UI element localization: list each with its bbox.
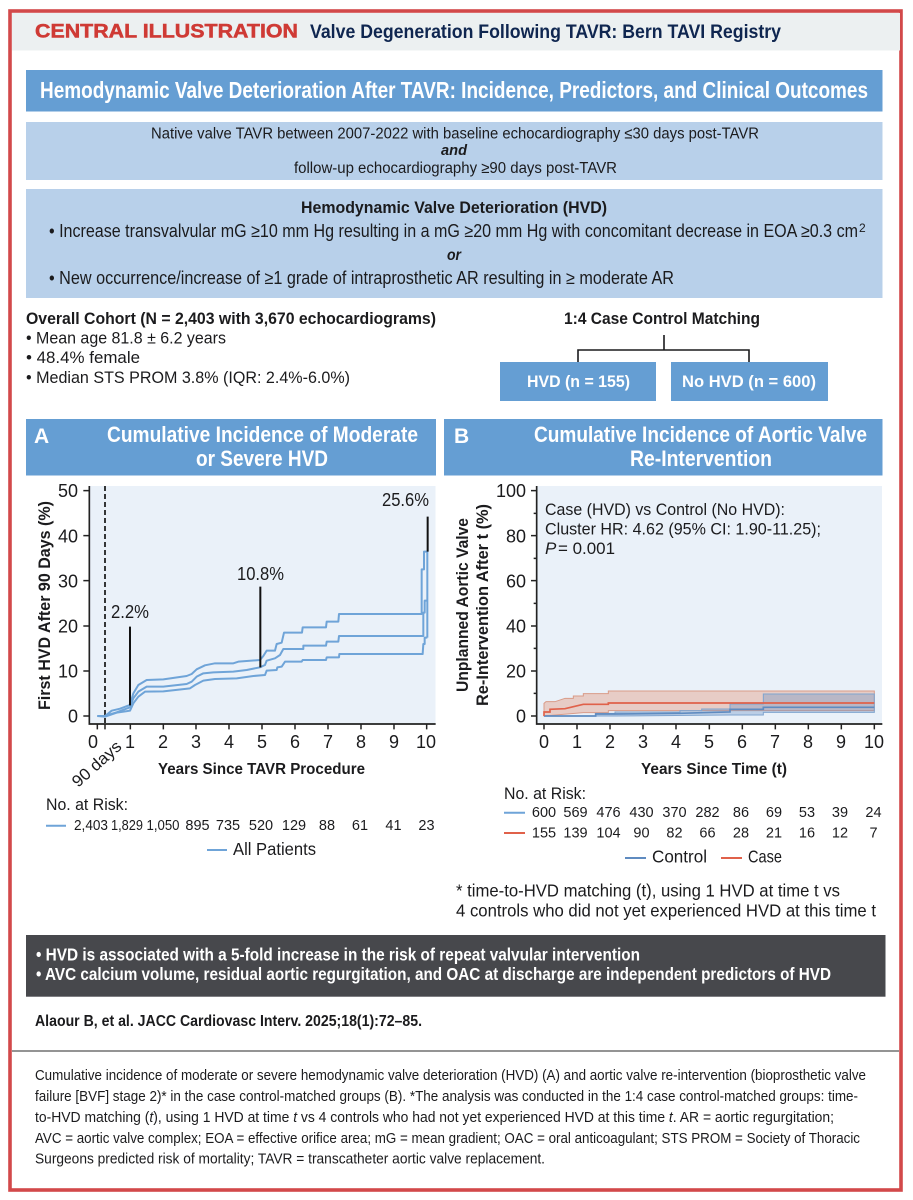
chart A labels: 2.2% xyxy=(111,602,149,622)
chart A: cumulative incidence of HVD: Years Since TAVR Procedure xyxy=(158,761,365,778)
case control matching diagram: 1:4 Case Control Matching xyxy=(564,310,760,328)
panel A heading xyxy=(26,419,436,476)
chart B number at risk table: 16 xyxy=(799,826,815,842)
chart B: aortic valve re-intervention: Re-Intervention After t (%) xyxy=(474,504,492,706)
HVD definition box: • New occurrence/increase of ≥1 grade of intraprosthetic AR resulting in ≥ moderate AR xyxy=(49,268,674,288)
overall cohort text: • Median STS PROM 3.8% (IQR: 2.4%-6.0%) xyxy=(26,368,350,387)
chart A labels: 30 xyxy=(58,572,78,592)
chart B: aortic valve re-intervention: Years Since Time (t) xyxy=(641,761,787,778)
chart A: cumulative incidence of HVD xyxy=(36,481,436,791)
chart A labels: 7 xyxy=(323,732,333,752)
panel B heading: Cumulative Incidence of Aortic Valve xyxy=(534,422,867,447)
chart A labels: 25.6% xyxy=(382,490,429,510)
chart B number at risk table: 12 xyxy=(832,826,848,842)
case control matching diagram xyxy=(500,310,828,401)
chart A labels: 6 xyxy=(290,732,300,752)
chart B number at risk table: Control xyxy=(652,846,707,866)
chart A labels xyxy=(58,481,436,791)
panel B heading: Re-Intervention xyxy=(630,446,772,471)
panel B heading: B xyxy=(454,425,469,448)
chart A number at risk table: All Patients xyxy=(233,839,316,859)
chart B number at risk table: 82 xyxy=(666,826,683,842)
figure caption: AVC = aortic valve complex; EOA = effective orifice area; mG = mean gradient; OAC = oral anticoagulant; STS PROM = Society of Thoracic xyxy=(35,1131,860,1147)
chart A: cumulative incidence of HVD: First HVD After 90 Days (%) xyxy=(36,501,54,710)
chart B number at risk table: 21 xyxy=(766,826,782,842)
overall cohort text xyxy=(26,309,436,387)
panel A heading: or Severe HVD xyxy=(196,446,328,471)
matching footnote xyxy=(456,880,876,920)
chart B number at risk table: 86 xyxy=(733,805,749,821)
chart A number at risk table: 1,050 xyxy=(146,818,180,834)
chart B labels: 0 xyxy=(539,732,549,752)
overall cohort text: • 48.4% female xyxy=(26,348,140,367)
figure caption: Cumulative incidence of moderate or severe hemodynamic valve deterioration (HVD) (A) and aortic valve re-intervention (bioprosthetic valve xyxy=(35,1068,866,1084)
chart B number at risk table: 282 xyxy=(695,805,720,821)
chart A labels: 5 xyxy=(257,732,267,752)
chart A labels: 20 xyxy=(58,616,78,636)
panel B heading xyxy=(444,419,882,476)
chart B number at risk table: 69 xyxy=(766,805,782,821)
chart B labels: 1 xyxy=(572,732,582,752)
chart A number at risk table: 1,829 xyxy=(111,818,143,834)
chart B number at risk table: 104 xyxy=(596,826,621,842)
HVD definition box: 2 xyxy=(859,221,866,235)
chart A number at risk table: 88 xyxy=(319,818,335,834)
chart B: aortic valve re-intervention: P xyxy=(545,539,557,558)
chart A labels: 10.8% xyxy=(237,564,284,584)
chart B number at risk table: No. at Risk: xyxy=(504,785,586,803)
chart A labels: 9 xyxy=(389,732,399,752)
chart B number at risk table: 155 xyxy=(532,826,556,842)
chart A number at risk table: 61 xyxy=(352,818,368,834)
chart B: aortic valve re-intervention xyxy=(454,481,884,778)
chart B number at risk table: 24 xyxy=(865,805,882,821)
key takeaways dark box xyxy=(26,935,886,997)
chart B number at risk table: 53 xyxy=(799,805,815,821)
key takeaways dark box: • HVD is associated with a 5-fold increase in the risk of repeat valvular intervention xyxy=(36,944,640,964)
chart B labels: 9 xyxy=(836,732,846,752)
chart B: aortic valve re-intervention: Cluster HR: 4.62 (95% CI: 1.90-11.25); xyxy=(545,520,821,538)
figure caption xyxy=(35,1068,866,1168)
chart B number at risk table: 430 xyxy=(629,805,654,821)
matching footnote: * time-to-HVD matching (t), using 1 HVD at time t vs xyxy=(456,880,840,900)
title bar xyxy=(26,70,882,112)
chart B: aortic valve re-intervention: = 0.001 xyxy=(558,539,615,558)
chart A labels: 0 xyxy=(68,706,78,726)
chart A labels: 0 xyxy=(88,732,98,752)
overall cohort text: • Mean age 81.8 ± 6.2 years xyxy=(26,328,226,348)
chart B number at risk table: 569 xyxy=(563,805,588,821)
chart A labels: 10 xyxy=(416,732,436,752)
HVD definition box: or xyxy=(447,247,462,264)
header band xyxy=(12,13,900,50)
chart A number at risk table: 23 xyxy=(418,818,435,834)
chart A labels: 10 xyxy=(58,662,78,682)
matching footnote: 4 controls who did not yet experienced HVD at this time t xyxy=(456,900,876,920)
chart B labels: 0 xyxy=(516,706,526,726)
chart B number at risk table: 66 xyxy=(699,826,716,842)
chart A labels: 90 days xyxy=(69,737,125,791)
citation: Alaour B, et al. JACC Cardiovasc Interv. 2025;18(1):72–85. xyxy=(35,1013,422,1030)
chart B labels: 100 xyxy=(496,481,526,501)
inclusion criteria box xyxy=(26,122,882,180)
chart B labels: 10 xyxy=(864,732,884,752)
chart B labels: 60 xyxy=(506,572,526,592)
chart B number at risk table: 476 xyxy=(596,805,621,821)
chart B labels: 20 xyxy=(506,662,526,682)
HVD definition box xyxy=(26,189,882,298)
chart B number at risk table: 600 xyxy=(532,805,556,821)
chart B number at risk table: 7 xyxy=(869,826,878,842)
chart A number at risk table: 2,403 xyxy=(74,818,108,834)
chart A number at risk table xyxy=(46,796,435,859)
chart B labels: 80 xyxy=(506,526,526,546)
chart B: aortic valve re-intervention: Case (HVD) vs Control (No HVD): xyxy=(545,500,785,519)
chart A labels: 8 xyxy=(356,732,366,752)
chart A number at risk table: 895 xyxy=(185,818,210,834)
chart A number at risk table: 129 xyxy=(282,818,306,834)
chart A number at risk table: No. at Risk: xyxy=(46,796,128,814)
inclusion criteria box: and xyxy=(441,142,468,159)
chart B labels: 2 xyxy=(605,732,615,752)
overall cohort text: Overall Cohort (N = 2,403 with 3,670 echocardiograms) xyxy=(26,309,436,328)
chart B number at risk table: Case xyxy=(748,846,782,866)
chart B labels xyxy=(496,481,884,752)
chart A labels: 4 xyxy=(224,732,234,752)
figure caption: failure [BVF] stage 2)* in the case control-matched groups (B). *The analysis was conducted in the 1:4 case control-matched groups: time- xyxy=(35,1089,858,1105)
chart B labels: 3 xyxy=(638,732,648,752)
HVD definition box: Hemodynamic Valve Deterioration (HVD) xyxy=(301,199,607,217)
chart A labels: 40 xyxy=(58,526,78,546)
chart B number at risk table: 370 xyxy=(662,805,687,821)
chart B labels: 5 xyxy=(704,732,714,752)
chart A labels: 2 xyxy=(158,732,168,752)
chart A number at risk table: 41 xyxy=(385,818,402,834)
chart B number at risk table xyxy=(504,785,882,866)
chart B number at risk table: 28 xyxy=(733,826,749,842)
header band: Valve Degeneration Following TAVR: Bern TAVI Registry xyxy=(310,21,781,43)
chart B number at risk table: 139 xyxy=(563,826,588,842)
case control matching diagram: No HVD (n = 600) xyxy=(682,373,816,391)
header band: CENTRAL ILLUSTRATION xyxy=(35,22,298,42)
inclusion criteria box: follow-up echocardiography ≥90 days post-TAVR xyxy=(294,160,617,177)
chart A number at risk table: 735 xyxy=(216,818,240,834)
chart B labels: 40 xyxy=(506,616,526,636)
figure caption: to-HVD matching (t), using 1 HVD at time t vs 4 controls who had not yet experienced HVD at this time t. AR = aortic regurgitation; xyxy=(35,1110,834,1126)
chart A labels: 1 xyxy=(125,732,135,752)
chart A labels: 3 xyxy=(191,732,201,752)
chart B labels: 6 xyxy=(737,732,747,752)
chart A labels: 50 xyxy=(58,481,78,501)
chart B labels: 7 xyxy=(770,732,780,752)
inclusion criteria box: Native valve TAVR between 2007-2022 with baseline echocardiography ≤30 days post-TAVR xyxy=(151,126,759,142)
chart B labels: 4 xyxy=(671,732,681,752)
chart B: aortic valve re-intervention: Unplanned Aortic Valve xyxy=(454,518,472,692)
chart B labels: 8 xyxy=(803,732,813,752)
figure caption: Surgeons predicted risk of mortality; TAVR = transcatheter aortic valve replacement. xyxy=(35,1152,545,1168)
chart B number at risk table: 39 xyxy=(832,805,848,821)
chart A number at risk table: 520 xyxy=(249,818,273,834)
panel A heading: Cumulative Incidence of Moderate xyxy=(107,422,418,447)
panel A heading: A xyxy=(34,425,49,448)
case control matching diagram: HVD (n = 155) xyxy=(527,373,630,391)
chart B number at risk table: 90 xyxy=(633,826,650,842)
